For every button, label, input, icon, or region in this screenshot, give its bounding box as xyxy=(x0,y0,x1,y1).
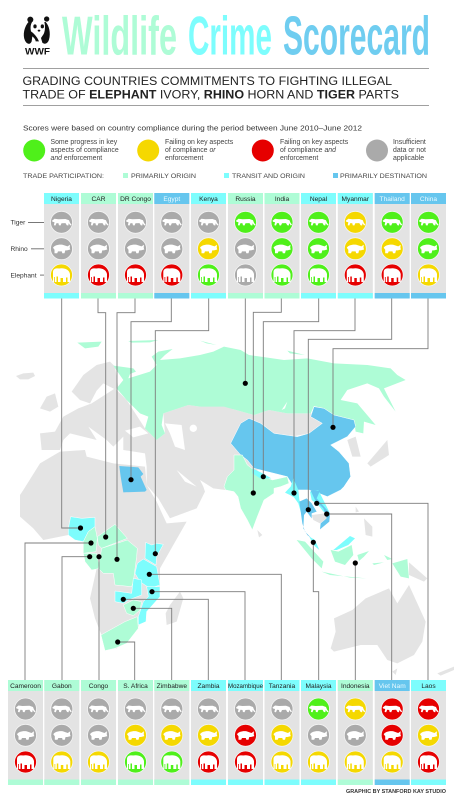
map: Kenya xyxy=(145,542,163,565)
connector: Tanzania xyxy=(147,572,281,680)
column: India xyxy=(264,193,300,298)
column: Tanzania: Tanzania xyxy=(269,683,296,690)
connector: Nigeria xyxy=(62,298,83,531)
map: coloured Asia xyxy=(224,407,356,530)
column: India: India xyxy=(275,196,289,203)
column: Indonesia xyxy=(338,680,373,785)
connector: Russia xyxy=(243,298,248,386)
map: Egypt xyxy=(119,466,147,492)
connector: Kenya xyxy=(153,298,209,556)
connector: Malaysia xyxy=(311,540,319,680)
legend item: failing on some: Failing on key aspects xyxy=(165,139,234,146)
column: Egypt xyxy=(154,193,189,298)
connector lines and location dots xyxy=(25,298,428,680)
map: South Africa xyxy=(101,617,138,651)
column: Kenya xyxy=(191,193,226,298)
connector: China xyxy=(330,298,428,430)
connector: Cameroon xyxy=(25,540,94,680)
map: Thailand xyxy=(299,498,317,538)
connector: Mozambique xyxy=(149,589,245,680)
legend item: failing on all: Failing on key aspects xyxy=(280,139,349,146)
column: Nigeria: Nigeria xyxy=(51,196,72,203)
connector: DR Congo xyxy=(114,298,135,562)
map: India xyxy=(224,455,289,530)
connector: India xyxy=(251,298,281,496)
column: Mozambique: Mozambique xyxy=(228,683,263,690)
column: Thailand: Thailand xyxy=(380,196,405,203)
column: CAR xyxy=(81,193,116,298)
column: Congo: Congo xyxy=(89,683,109,690)
column: Cameroon xyxy=(8,680,43,785)
row labels: Tiger, Rhino, Elephant: Rhino xyxy=(10,246,28,253)
map: Malaysia xyxy=(309,536,355,550)
map: Zimbabwe xyxy=(123,600,142,616)
connector: CAR xyxy=(98,298,108,540)
map: Viet Nam xyxy=(311,491,330,529)
subtitle: GRADING COUNTRIES COMMITMENTS TO FIGHTING ILLEGAL xyxy=(22,74,392,88)
column: China: China xyxy=(420,196,437,203)
title: Wildlife xyxy=(62,4,177,66)
column: Indonesia: Indonesia xyxy=(341,683,370,690)
map: Laos xyxy=(310,490,330,513)
legend item: insufficient data: data or not xyxy=(393,147,426,154)
column: Myanmar: Myanmar xyxy=(342,196,370,203)
map: China xyxy=(231,407,356,497)
column: China xyxy=(411,193,446,298)
legend: trade participation xyxy=(23,173,427,180)
column: Zimbabwe xyxy=(154,680,189,785)
map: Myanmar xyxy=(285,478,303,515)
column: Laos xyxy=(411,680,446,785)
column: Malaysia: Malaysia xyxy=(305,683,332,690)
connector: Zimbabwe xyxy=(131,606,172,680)
column: Russia: Russia xyxy=(235,196,256,203)
column: Egypt: Egypt xyxy=(163,196,180,203)
column: Viet Nam: Viet Nam xyxy=(379,683,406,690)
map: Tanzania xyxy=(135,559,160,588)
column: Mozambique xyxy=(228,680,263,785)
map: Zambia xyxy=(115,578,142,603)
map: south-east Asia xyxy=(285,478,409,578)
map: DR Congo xyxy=(98,540,137,587)
connector: Gabon xyxy=(62,554,92,680)
map: Russia xyxy=(77,340,406,440)
connector: Thailand xyxy=(306,298,392,512)
column: Zambia xyxy=(191,680,226,785)
title xyxy=(62,4,430,66)
column: Thailand xyxy=(375,193,410,298)
column: DR Congo xyxy=(118,193,153,298)
column: DR Congo: DR Congo xyxy=(120,196,151,203)
column: Malaysia xyxy=(301,680,336,785)
legend: trade participation: TRANSIT AND ORIGIN xyxy=(232,173,305,180)
connector: Congo xyxy=(96,554,102,680)
column: S. Africa: S. Africa xyxy=(123,683,148,690)
logo: WWF panda: WWF xyxy=(25,46,50,58)
subtitle: TRADE OF ELEPHANT IVORY, RHINO HORN AND TIGER PARTS xyxy=(22,88,399,102)
column: Gabon xyxy=(44,680,79,785)
legend item: some progress: Some progress in key xyxy=(50,139,118,146)
column: CAR: CAR xyxy=(92,196,106,203)
legend item: some progress: and enforcement xyxy=(50,155,102,162)
column: Nigeria xyxy=(44,193,79,298)
connector: Egypt xyxy=(128,298,171,482)
map: Indonesia xyxy=(297,540,409,578)
credit: GRAPHIC BY STANFORD KAY STUDIO xyxy=(346,789,447,795)
legend item: failing on all xyxy=(252,139,349,162)
subtitle xyxy=(22,74,399,102)
bottom country columns xyxy=(8,680,446,785)
row labels: Tiger, Rhino, Elephant: Tiger xyxy=(10,220,26,226)
column: Russia xyxy=(228,193,263,298)
map: Nepal xyxy=(252,468,271,479)
connector: Myanmar xyxy=(291,298,355,496)
connector: Indonesia xyxy=(353,560,358,680)
legend: trade participation: PRIMARILY DESTINATION xyxy=(340,173,427,180)
map: Gabon and Congo xyxy=(83,553,100,570)
column: Laos: Laos xyxy=(421,683,436,690)
column: Tanzania xyxy=(264,680,300,785)
column: Nepal: Nepal xyxy=(310,196,328,203)
column: S. Africa xyxy=(118,680,153,785)
legend item: insufficient data xyxy=(366,139,426,162)
legend item: failing on some: of compliance or xyxy=(165,147,216,154)
column: Kenya: Kenya xyxy=(199,196,218,203)
connector: Zambia xyxy=(121,597,208,680)
legend item: failing on all: enforcement xyxy=(280,155,318,162)
legend: scores xyxy=(23,139,426,162)
legend item: some progress xyxy=(23,139,119,162)
map: Nigeria xyxy=(68,517,95,542)
legend item: failing on some: enforcement xyxy=(165,155,203,162)
column: Myanmar xyxy=(338,193,373,298)
connector: Viet Nam xyxy=(324,511,392,680)
column: Cameroon: Cameroon xyxy=(10,683,41,690)
map: Cambodia xyxy=(312,513,327,523)
scores note: Scores were based on country compliance during the period between June 2010–June 2012 xyxy=(23,124,362,132)
legend item: insufficient data: applicable xyxy=(393,155,424,162)
column: Zambia: Zambia xyxy=(198,683,220,690)
connector: South Africa xyxy=(115,639,135,680)
legend: trade participation: TRADE PARTICIPATION: xyxy=(23,173,104,180)
logo: WWF panda xyxy=(24,16,50,58)
legend item: insufficient data: Insufficient xyxy=(393,139,426,146)
map: grey land xyxy=(16,362,454,676)
map: Africa xyxy=(68,517,163,651)
connector: Laos xyxy=(314,501,428,680)
column: Nepal xyxy=(301,193,336,298)
column: Zimbabwe: Zimbabwe xyxy=(157,683,187,690)
top country columns xyxy=(44,193,446,298)
legend: trade participation: PRIMARILY ORIGIN xyxy=(131,173,197,180)
legend item: failing on all: of compliance and xyxy=(280,147,337,154)
legend item: some progress: aspects of compliance xyxy=(50,147,119,154)
map: Mozambique xyxy=(138,587,160,625)
row labels: Tiger, Rhino, Elephant xyxy=(10,220,50,280)
column: Viet Nam xyxy=(375,680,410,785)
map: Cameroon xyxy=(83,527,97,553)
row labels: Tiger, Rhino, Elephant: Elephant xyxy=(10,272,37,280)
column: Congo xyxy=(81,680,116,785)
map: Central African Republic xyxy=(97,524,127,548)
connector: Nepal xyxy=(261,298,319,479)
legend item: failing on some xyxy=(137,139,234,162)
column: Gabon: Gabon xyxy=(52,683,72,690)
world map xyxy=(16,340,454,676)
title: Crime xyxy=(188,4,272,66)
